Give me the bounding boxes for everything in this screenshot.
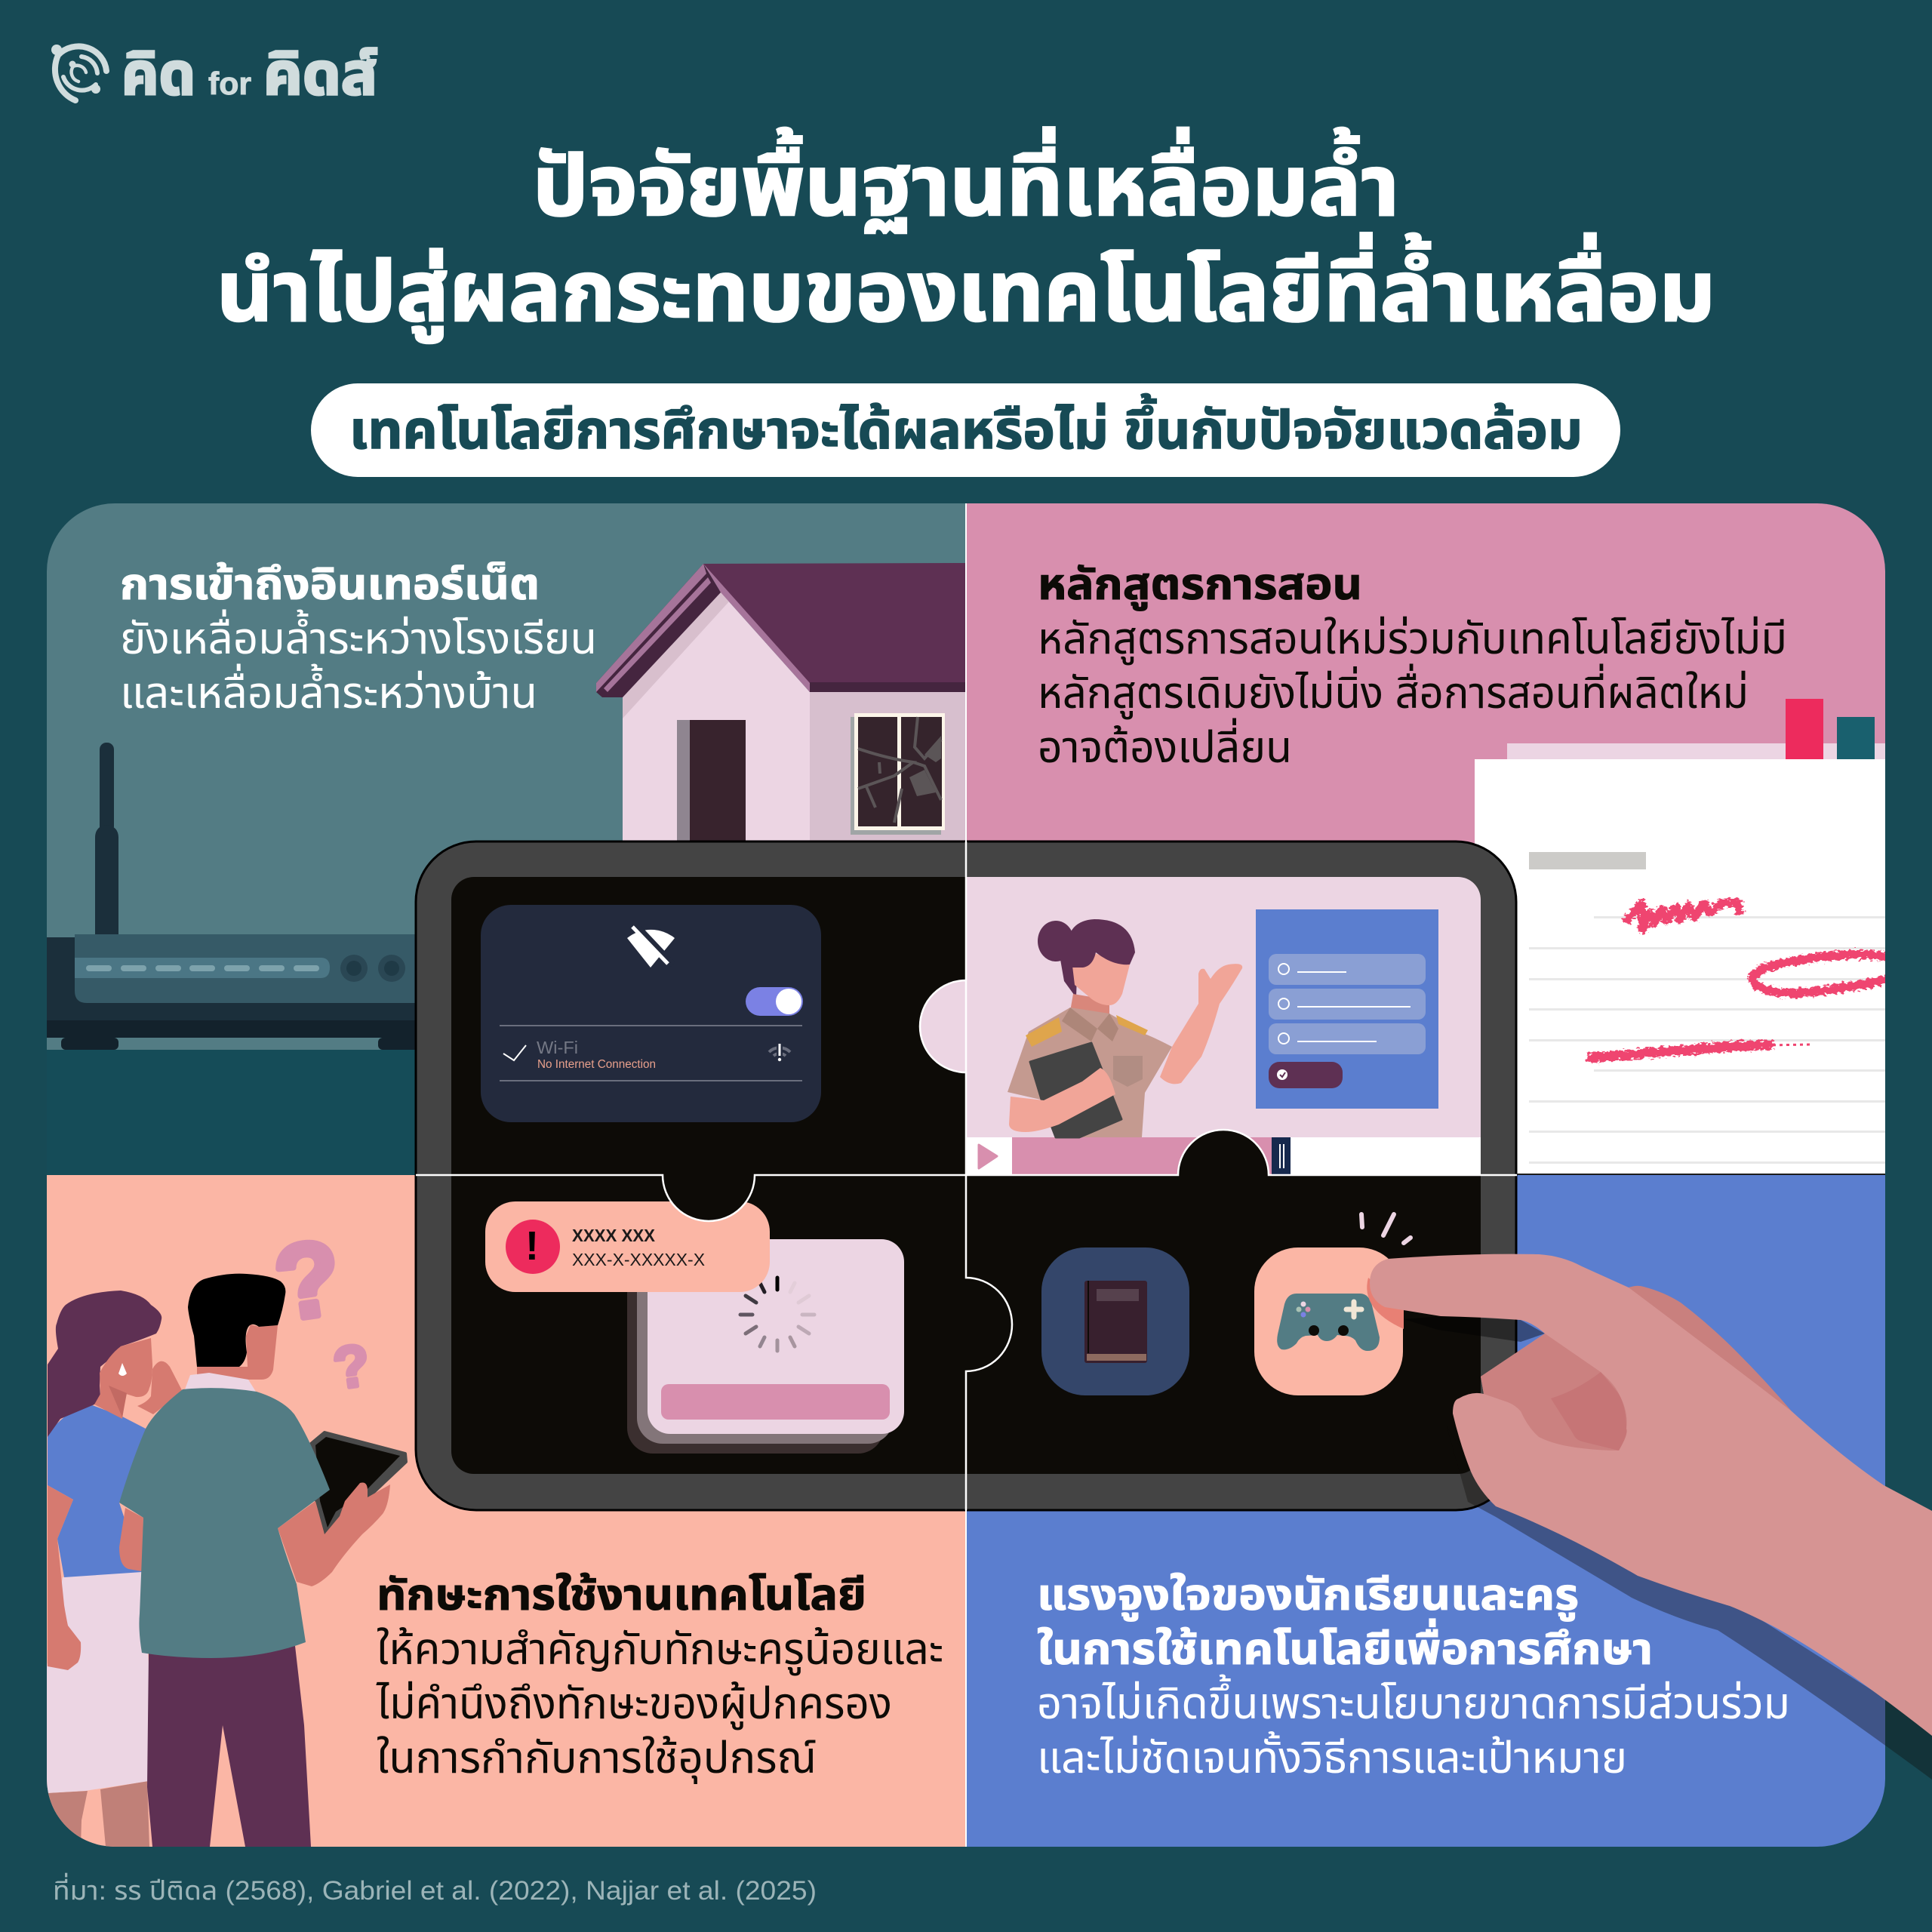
subtitle pill: [311, 383, 1620, 477]
text block: curriculum: [1038, 560, 1787, 772]
text block: tech skills: [376, 1571, 943, 1784]
source citation: ที่มา: รร ปีติดล (2568), Gabriel et al. (2022), Najjar et al. (2025): [53, 1872, 817, 1906]
spinner: [740, 1278, 814, 1351]
scribble: underline: [1587, 1044, 1774, 1058]
notification popup stack: XXXX XXX: [572, 1226, 656, 1245]
text block: motivation: อาจไม่เกิดขึ้นเพราะนโยบายขาดการมีส่วนร่วม: [1037, 1674, 1790, 1728]
text block: curriculum: อาจต้องเปลี่ยน: [1038, 718, 1292, 772]
screen: lesson video: [966, 877, 1481, 1175]
question marks: ?: [268, 1217, 348, 1343]
hand: [1367, 1254, 1932, 1736]
text block: tech skills: ไม่คำนึงถึงทักษะของผู้ปกครอง: [376, 1679, 892, 1730]
illustration: parents with tablet: [47, 1217, 406, 1847]
logo: for: [208, 66, 251, 101]
scribble: squiggle: [1626, 903, 1740, 930]
text block: tech skills: ในการกำกับการใช้อุปกรณ์: [377, 1734, 817, 1784]
notification popup stack: XXX-X-XXXXX-X: [572, 1250, 705, 1269]
app tile: book: [1041, 1247, 1189, 1395]
woman: [47, 1291, 183, 1847]
illustration: house: [596, 563, 966, 845]
text block: curriculum: หลักสูตรการสอน: [1038, 560, 1362, 611]
wifi label: Wi-Fi: [537, 1038, 578, 1057]
title: ปัจจัยพื้นฐานที่เหลื่อมล้ำ: [533, 127, 1399, 233]
text block: tech skills: ทักษะการใช้งานเทคโนโลยี: [377, 1571, 866, 1620]
wifi card: [481, 905, 821, 1122]
panel dividers: [965, 503, 1885, 1847]
icon: wifi off: [627, 925, 675, 968]
wifi card: No Internet Connection: [537, 1058, 656, 1071]
icon: check: [503, 1045, 526, 1060]
text block: internet access: การเข้าถึงอินเทอร์เน็ต: [120, 560, 540, 609]
title: นำไปสู่ผลกระทบของเทคโนโลยีที่ล้ำเหลื่อม: [217, 232, 1715, 343]
panel: quadrants background: [47, 503, 1885, 1847]
text block: motivation: [1037, 1571, 1790, 1783]
app tile: game: [1254, 1214, 1411, 1395]
illustration: lesson paper: [1475, 699, 1902, 1175]
text block: motivation: และไม่ชัดเจนทั้งวิธีการและเป้าหมาย: [1037, 1730, 1627, 1783]
text block: motivation: แรงจูงใจของนักเรียนและครู: [1037, 1571, 1579, 1622]
illustration: router: [47, 743, 424, 1050]
screen: [451, 877, 1481, 1474]
subtitle pill: เทคโนโลยีการศึกษาจะได้ผลหรือไม่ ขึ้นกับปัจจัยแวดล้อม: [349, 393, 1583, 460]
text block: motivation: ในการใช้เทคโนโลยีเพื่อการศึกษา: [1037, 1618, 1653, 1674]
illustration: parents with tablet: ?: [329, 1331, 374, 1401]
text block: curriculum: หลักสูตรการสอนใหม่ร่วมกับเทคโนโลยียังไม่มี: [1038, 614, 1787, 665]
text block: internet access: และเหลื่อมล้ำระหว่างบ้าน: [120, 663, 537, 718]
quiz panel: [1256, 909, 1438, 1109]
text block: tech skills: ให้ความสำคัญกับทักษะครูน้อยและ: [377, 1625, 943, 1675]
notification popup stack: [485, 1201, 904, 1454]
notification popup stack: !: [525, 1223, 539, 1269]
text block: internet access: ยังเหลื่อมล้ำระหว่างโรงเรียน: [120, 609, 597, 663]
logo wordmark: คิด: [122, 41, 195, 107]
icon: wifi warning: [769, 1043, 790, 1061]
scribble: circle: [1752, 954, 1902, 993]
tablet: [416, 841, 1517, 1510]
tablet body: [416, 841, 1516, 1510]
tap marks: [1361, 1214, 1411, 1243]
hand shadow: [1404, 1316, 1932, 1780]
logo: [51, 41, 377, 107]
error notification: [485, 1201, 770, 1292]
logo: คิดส์: [263, 41, 377, 107]
text block: curriculum: หลักสูตรเดิมยังไม่นิ่ง สื่อการสอนที่ผลิตใหม่: [1038, 663, 1749, 719]
man: [119, 1274, 406, 1847]
toggle: [746, 987, 803, 1016]
puzzle divider lines: [416, 841, 1517, 1510]
text block: internet access: [120, 560, 597, 718]
puzzle pieces: [663, 1175, 755, 1221]
teacher: [1008, 919, 1242, 1137]
puzzle notch: [920, 980, 966, 1072]
logo icon: [51, 45, 106, 100]
title: [217, 127, 1715, 343]
